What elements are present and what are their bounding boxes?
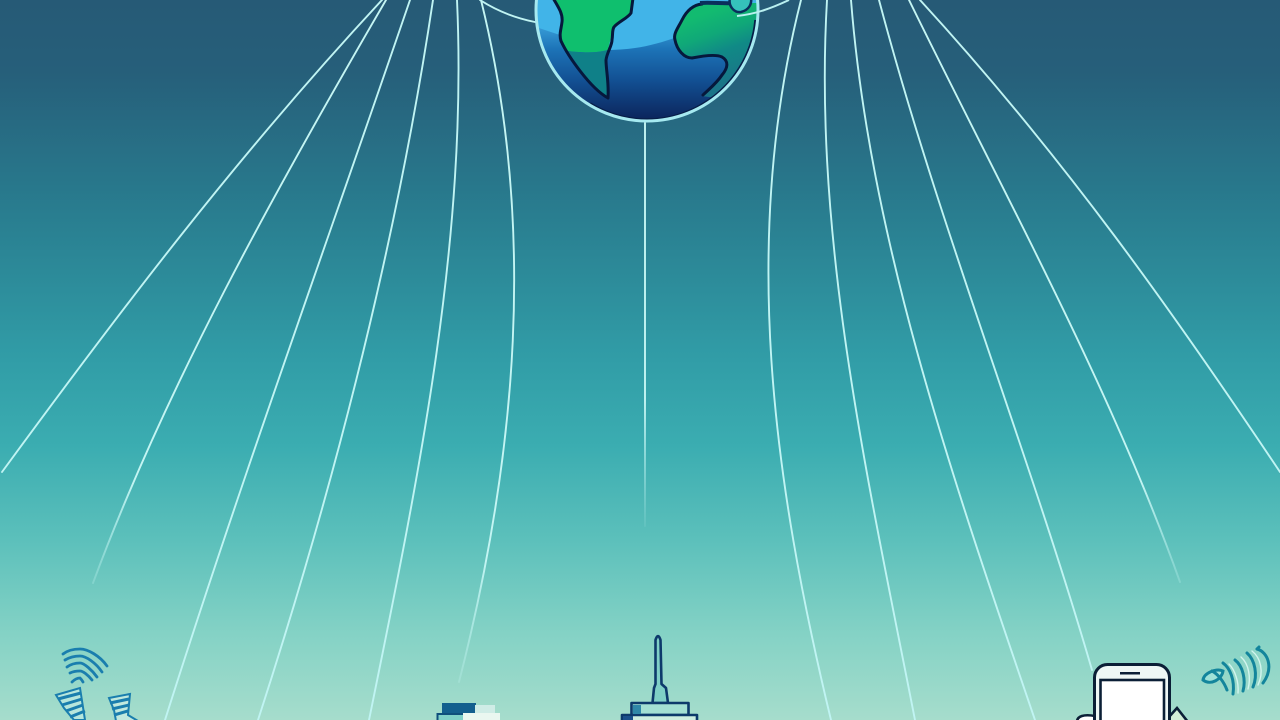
screen [1100,680,1164,720]
land: right continent [675,3,765,100]
phone body [1094,664,1170,720]
left finger [1077,715,1095,720]
icon: smartphone in hand [1077,664,1188,720]
icon: office building [438,703,500,720]
icon: wifi signal [63,649,107,682]
icon: left antenna [56,688,85,720]
icon: wireless waves right [1203,647,1269,694]
ocean [538,0,756,118]
icon: right antenna [109,694,138,720]
globe rim [590,20,756,120]
land: left continent [553,0,633,98]
right finger [1168,708,1188,720]
orbit arc right [737,0,789,16]
orbit satellite blob [730,0,751,12]
icon: skyscraper [622,636,697,720]
speaker [1120,672,1140,674]
globe [530,0,789,130]
